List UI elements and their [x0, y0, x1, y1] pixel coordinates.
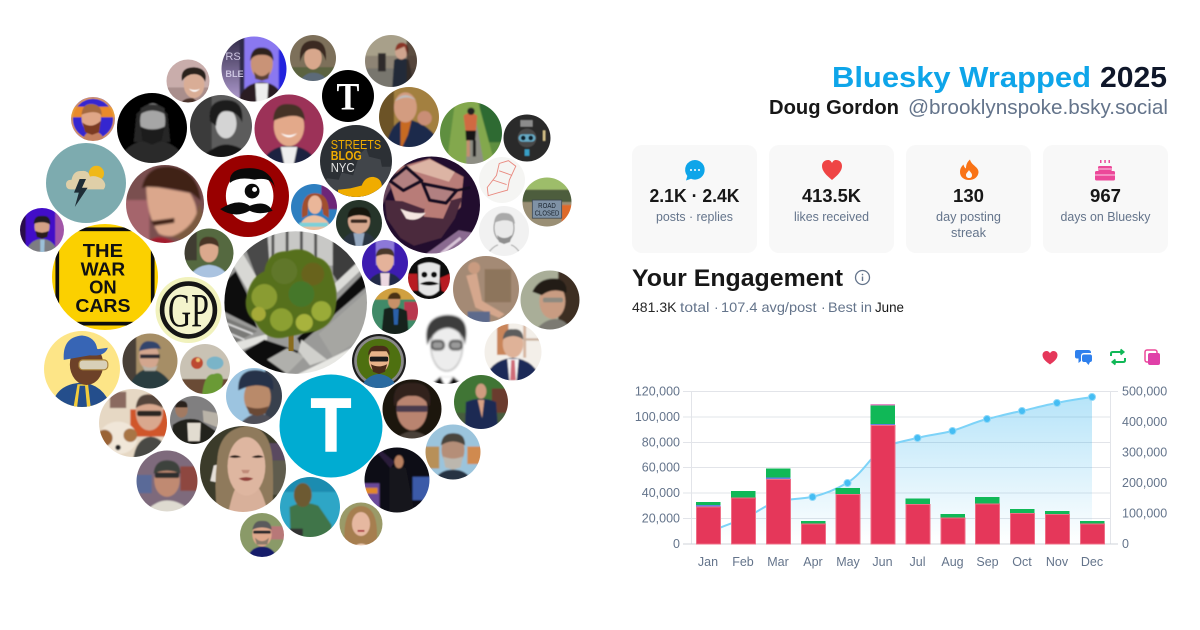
avatar: man in cap with city street	[120, 331, 180, 391]
avatar: red line sketch	[479, 157, 525, 203]
left axis labels: 20,000	[642, 512, 680, 526]
avatar: Streetsblog NYC	[320, 125, 392, 197]
month labels: Aug	[941, 555, 964, 569]
month labels: Nov	[1046, 555, 1069, 569]
avatar: pencil sketch man	[479, 206, 529, 256]
icon: reposts legend	[1111, 350, 1125, 364]
right axis labels	[1122, 384, 1167, 551]
title: 2025	[1100, 62, 1167, 94]
avatar: road closed sign: ROAD	[538, 203, 556, 210]
avatar: yellow cartoon in cap	[40, 327, 124, 411]
month labels: Jul	[910, 555, 925, 569]
month labels: Sep	[976, 555, 999, 569]
engagement summary: Best in	[828, 299, 872, 315]
avatar: man on purple set: RS	[225, 51, 241, 63]
avatar: man in blue suit with trees	[454, 375, 508, 429]
avatar: man in suit on purple	[362, 240, 408, 286]
bar: Aug	[940, 514, 965, 544]
avatar cluster	[18, 32, 582, 559]
bar: Apr	[801, 521, 826, 544]
icon: flame	[960, 160, 979, 180]
avatar: black and white woman	[190, 95, 252, 157]
panel: posts and replies: 2.1K · 2.4K	[650, 186, 740, 206]
avatar: weather icon	[46, 143, 126, 223]
icon: birthday cake	[1095, 160, 1115, 180]
user name and handle	[769, 97, 1168, 119]
avatar: Kermit sipping tea	[178, 342, 232, 396]
month labels: May	[836, 555, 861, 569]
avatar: gray bearded man	[426, 424, 480, 480]
left axis labels: 120,000	[635, 384, 680, 398]
right axis labels: 200,000	[1122, 476, 1167, 490]
bar: Dec	[1080, 521, 1104, 544]
stacked bars	[696, 404, 1104, 544]
engagement summary: ·	[821, 299, 826, 315]
left axis labels: 80,000	[642, 436, 680, 450]
month labels	[698, 555, 1103, 569]
engagement summary: 481.3K	[632, 299, 677, 315]
area under cumulative line	[708, 397, 1092, 544]
avatar: woman selfie	[196, 422, 290, 516]
panel: day posting streak: 130	[953, 186, 984, 206]
avatar: road closed sign	[522, 178, 572, 226]
engagement summary: total	[680, 299, 710, 315]
icon: info	[856, 270, 870, 284]
avatar: man with glasses dark backdrop	[336, 200, 382, 246]
avatar: Streetsblog NYC: BLOG	[331, 148, 362, 163]
avatar: man in cap and glasses	[520, 270, 580, 330]
month labels: Jan	[698, 555, 718, 569]
user name and handle: @brooklynspoke.bsky.social	[908, 97, 1168, 119]
avatar: man with glasses and scribbled background	[133, 447, 201, 515]
avatar: bearded cartoon in green badge	[352, 334, 406, 388]
avatar: woman in plaza	[365, 35, 417, 87]
avatar: GP monogram	[156, 277, 222, 343]
left axis labels: 0	[673, 537, 680, 551]
avatar: The War on Cars	[52, 224, 158, 330]
avatar: curly hair man on pink	[166, 60, 210, 102]
month labels: Mar	[767, 555, 789, 569]
engagement summary: ·	[714, 299, 719, 315]
bar: Sep	[975, 497, 1000, 544]
icon: replies legend	[1075, 350, 1092, 365]
avatar: robot	[504, 114, 550, 162]
line data points	[809, 394, 1096, 500]
avatar: man on purple set	[222, 36, 286, 102]
panel: likes received: 413.5K	[802, 186, 861, 206]
month labels: Apr	[803, 555, 823, 569]
month labels: Dec	[1081, 555, 1103, 569]
avatar: The War on Cars: WAR	[81, 259, 125, 279]
panel: likes received: likes received	[794, 210, 869, 224]
avatar: Schumer pointing	[379, 87, 439, 147]
left axis labels	[635, 384, 680, 551]
left axis labels: 40,000	[642, 486, 680, 500]
engagement summary: 107.4 avg/post	[721, 299, 817, 315]
avatar: man with dark hair and glasses	[382, 380, 442, 438]
avatar: man in navy suit with cross	[484, 324, 542, 380]
right axis labels: 500,000	[1122, 384, 1167, 398]
avatar: painted man in suit	[372, 288, 418, 334]
avatar: Natty Boh mascot	[207, 155, 289, 237]
avatar: man on campaign stage	[361, 444, 433, 516]
avatar: road closed sign: CLOSED	[535, 211, 559, 218]
bar: Nov	[1045, 511, 1070, 544]
left axis labels: 60,000	[642, 460, 680, 474]
avatar: Streetsblog NYC: NYC	[331, 160, 355, 175]
avatar: man on purple set: BLE	[225, 69, 244, 79]
right axis labels: 400,000	[1122, 415, 1167, 429]
chart legend	[1042, 350, 1160, 365]
avatar: selfie man	[126, 165, 204, 243]
avatar: small man with purple backdrop	[20, 208, 64, 252]
avatar: tree over black and white streets	[224, 231, 367, 374]
cumulative line	[708, 397, 1092, 533]
avatar: The War on Cars: CARS	[75, 296, 130, 316]
avatar: NYT logo	[322, 70, 374, 122]
avatar: Streetsblog NYC: STREETS	[331, 137, 382, 152]
bar: Feb	[731, 491, 756, 544]
avatar: smiling man in suit on crimson	[254, 94, 324, 164]
combined bar and line chart	[635, 384, 1167, 569]
avatar: man with camera on blue	[277, 474, 343, 540]
avatar: person in tan room	[453, 256, 519, 322]
avatar: GP monogram: GP	[168, 285, 209, 338]
icon: chat bubble	[685, 160, 705, 180]
panel: posts and replies	[632, 145, 757, 253]
right axis labels: 300,000	[1122, 446, 1167, 460]
bar: Jun	[870, 404, 895, 544]
panel: days on Bluesky: 967	[1090, 186, 1121, 206]
right axis labels: 100,000	[1122, 506, 1167, 520]
panel: day posting streak: streak	[951, 226, 987, 240]
engagement summary	[632, 299, 904, 315]
month labels: Feb	[732, 555, 754, 569]
avatar: Zohran-style poster man	[71, 97, 115, 141]
avatar: woman with curly hair and glasses	[290, 35, 336, 81]
avatar: smiling man with glasses, blue shirt	[238, 511, 286, 559]
avatar: The War on Cars: THE	[83, 241, 123, 261]
avatar: bearded man in black	[117, 93, 187, 163]
panel: day posting streak: day posting	[936, 210, 1001, 224]
avatar: curly blonde woman	[337, 500, 385, 548]
bar: Jul	[906, 498, 930, 544]
bar: May	[836, 488, 860, 544]
avatar: The War on Cars: ON	[89, 277, 117, 297]
avatar: Teal T logo	[280, 374, 382, 478]
icon: quotes legend	[1145, 350, 1160, 365]
panel: likes received	[769, 145, 894, 253]
avatar: mustache mask on black and red	[408, 257, 450, 299]
avatar: ink portrait man with glasses	[424, 314, 468, 384]
month labels: Jun	[872, 555, 893, 569]
avatar: man in blue oxford shirt	[184, 228, 234, 278]
avatar: cyclist on green path	[440, 102, 502, 164]
avatar: smiling man with curly dog	[96, 386, 170, 460]
panel: days on Bluesky: days on Bluesky	[1060, 210, 1151, 224]
icon: likes legend	[1042, 351, 1058, 364]
bar: Jan	[696, 502, 720, 544]
panel: day posting streak	[906, 145, 1031, 253]
avatar: blonde woman on news set	[291, 184, 337, 230]
panel: days on Bluesky	[1043, 145, 1168, 253]
month labels: Oct	[1012, 555, 1032, 569]
avatar: smiling man large	[383, 156, 480, 254]
left axis labels: 100,000	[635, 410, 680, 424]
engagement summary: June	[875, 299, 904, 315]
right axis labels: 0	[1122, 537, 1129, 551]
bar: Mar	[766, 468, 790, 544]
avatar: NYT logo: T	[337, 75, 359, 119]
bar: Oct	[1010, 509, 1034, 544]
icon: heart	[822, 160, 842, 180]
panel: posts and replies: posts · replies	[656, 210, 733, 224]
user name and handle: Doug Gordon	[769, 97, 899, 119]
avatar: reclining man in dark jacket	[168, 394, 220, 446]
heading: Your Engagement: Your Engagement	[632, 265, 843, 292]
title: Bluesky Wrapped	[832, 62, 1091, 94]
avatar: bearded man by chain-link fence	[223, 365, 285, 427]
